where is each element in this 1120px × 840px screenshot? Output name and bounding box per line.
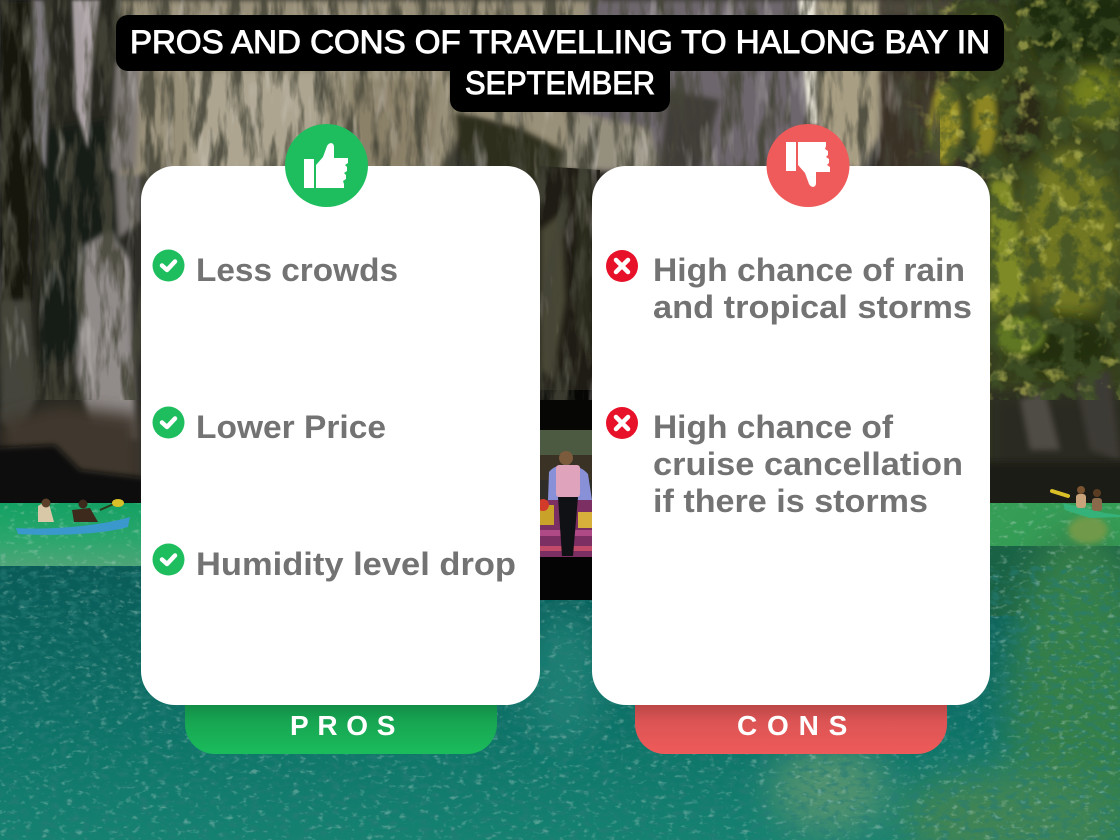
pros item: less crowds: Less crowds xyxy=(196,252,398,288)
cave wall xyxy=(540,166,600,400)
title line 2: SEPTEMBER xyxy=(465,65,655,101)
cons item: rain and storms: High chance of rain xyxy=(653,252,965,288)
cons label tab: CONS xyxy=(737,710,857,741)
cons item: rain and storms xyxy=(606,250,972,325)
panel: pros xyxy=(141,124,540,754)
title line 1: PROS AND CONS OF TRAVELLING TO HALONG BAY IN xyxy=(130,24,990,60)
cliff base xyxy=(0,396,140,478)
icon: thumbs up xyxy=(285,124,368,207)
middle purple grey rock xyxy=(570,0,815,170)
texture xyxy=(0,0,940,400)
upper tan rock face xyxy=(120,0,600,175)
kayak left xyxy=(16,498,130,535)
title banner xyxy=(116,15,1004,112)
left pale streaks xyxy=(72,0,100,150)
boat with people xyxy=(537,430,592,600)
pros card xyxy=(141,166,540,705)
pros label tab: PROS xyxy=(290,710,404,741)
arch moss xyxy=(452,110,567,180)
cons label tab xyxy=(635,695,947,754)
kayak right xyxy=(1052,486,1120,544)
left dark cliff xyxy=(32,0,135,394)
pros item: humidity: Humidity level drop xyxy=(196,546,516,582)
foliage xyxy=(947,0,1120,394)
water xyxy=(0,480,1120,840)
panel: cons xyxy=(592,124,990,754)
cons item: cruise cancellation: High chance of xyxy=(653,409,893,445)
cons item: cruise cancellation: cruise cancellation xyxy=(653,446,963,482)
cliffs xyxy=(0,0,1120,510)
pros item: lower price: Lower Price xyxy=(196,409,386,445)
cons item: cruise cancellation: if there is storms xyxy=(653,483,928,519)
icon: thumbs down xyxy=(766,124,850,207)
cons item: cruise cancellation xyxy=(606,407,963,519)
pros label tab xyxy=(185,695,497,754)
cons item: rain and storms: and tropical storms xyxy=(653,289,972,325)
cons card xyxy=(592,166,990,705)
